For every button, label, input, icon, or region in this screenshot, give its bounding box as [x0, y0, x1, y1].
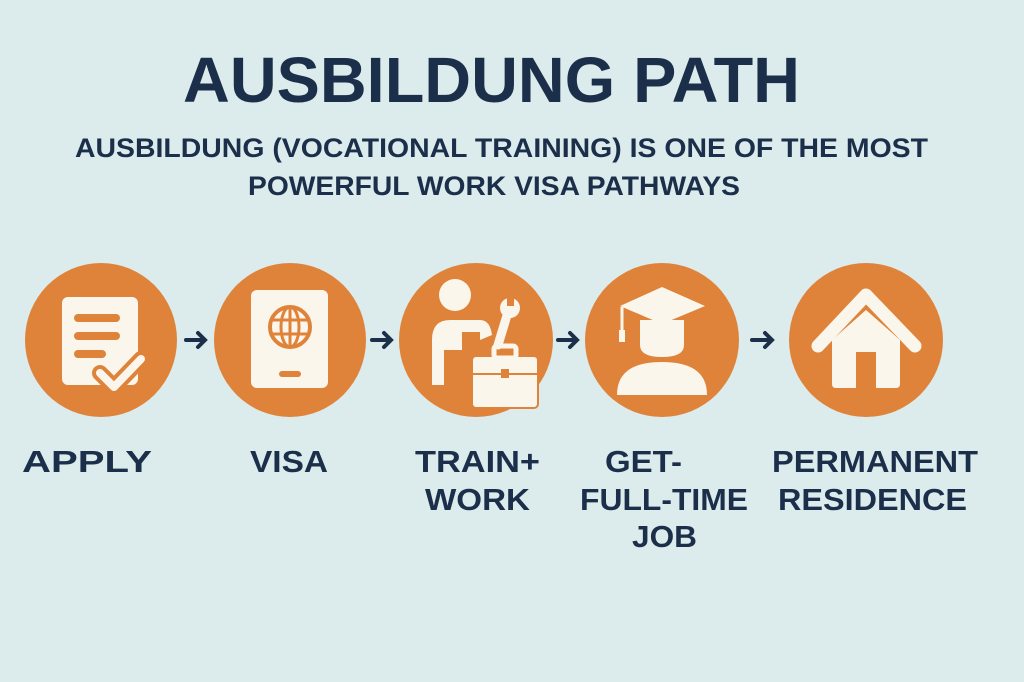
label: train + work	[415, 444, 540, 517]
label: permanent residence: RESIDENCE	[778, 482, 967, 517]
label: permanent residence	[772, 444, 978, 517]
step 4: graduate icon	[585, 263, 739, 417]
subtitle: POWERFUL WORK VISA PATHWAYS	[248, 171, 740, 201]
subtitle: AUSBILDUNG (VOCATIONAL TRAINING) IS ONE OF THE MOST	[75, 133, 929, 163]
step 3: train + work icon	[399, 263, 553, 417]
arrow 4	[752, 333, 772, 347]
label: get full-time job: JOB	[632, 519, 697, 554]
subtitle	[75, 133, 929, 201]
step 2: visa icon	[214, 263, 366, 417]
arrow 3	[558, 333, 577, 347]
label: get full-time job: FULL-TIME	[580, 482, 748, 517]
arrow 2	[372, 333, 391, 347]
label: permanent residence: PERMANENT	[772, 444, 978, 479]
label: get full-time job	[580, 444, 748, 554]
label: apply: APPLY	[22, 444, 152, 479]
title: AUSBILDUNG PATH	[183, 44, 800, 116]
label: train + work: WORK	[425, 482, 531, 517]
step 5: home icon	[789, 263, 943, 417]
arrow 1	[186, 333, 205, 347]
label: get full-time job: GET-	[605, 444, 682, 479]
step 1: apply icon	[25, 263, 177, 417]
label: train + work: TRAIN+	[415, 444, 540, 479]
label: visa: VISA	[250, 444, 328, 479]
